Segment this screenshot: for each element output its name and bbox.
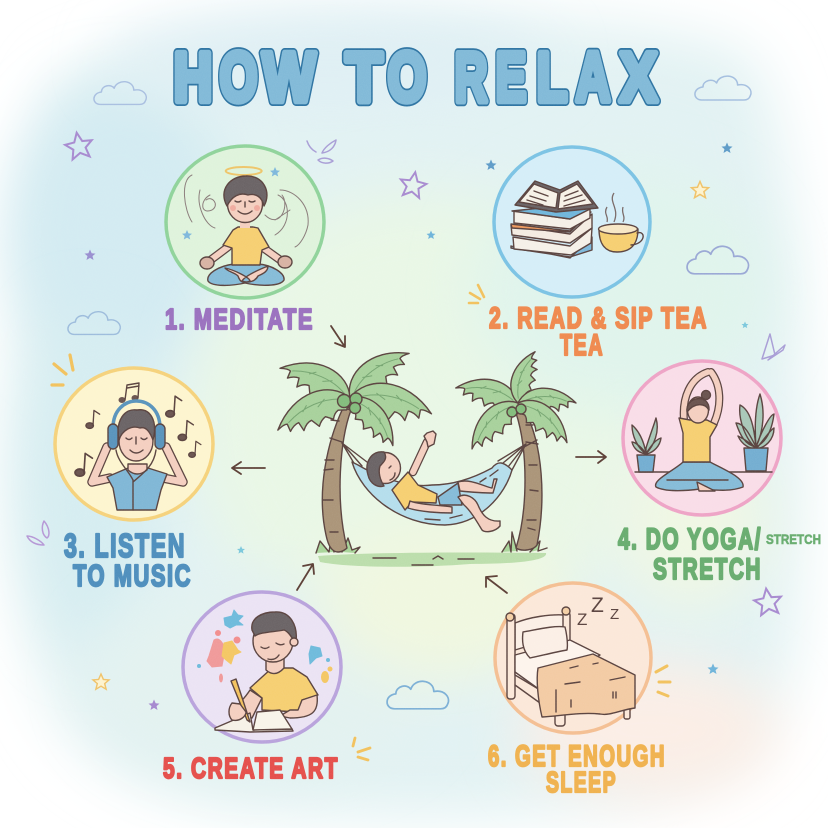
label: 2 read and sip tea (489, 302, 708, 362)
panel: central palms and hammock (270, 338, 577, 567)
icon: sleeping Z letters (577, 594, 619, 629)
left palm tree (270, 338, 436, 552)
label: 2 read and sip tea: TEA (560, 329, 604, 362)
label: 2 read and sip tea: 2. READ & SIP TEA (489, 302, 708, 335)
title: O (220, 38, 258, 116)
label: 6 get enough sleep: SLEEP (546, 767, 617, 799)
title: X (620, 38, 658, 116)
title: H (174, 38, 212, 116)
panel: 2 read and sip tea (494, 147, 650, 297)
title: R (454, 38, 488, 116)
panel: 4 yoga (623, 361, 781, 515)
title: R (454, 38, 488, 116)
arrow: to sleep (486, 576, 507, 593)
label: 1 meditate: 1. MEDITATE (165, 304, 314, 336)
label: 6 get enough sleep (488, 740, 666, 799)
title: W (262, 38, 316, 116)
title (174, 38, 658, 116)
icon: left potted plant (632, 418, 661, 472)
title: E (496, 38, 526, 116)
icon: music notes (75, 383, 201, 476)
hammock (330, 438, 538, 525)
decorative accents (27, 140, 785, 760)
title: W (262, 38, 316, 116)
title: T (346, 38, 382, 116)
decorative stars (63, 130, 783, 710)
title: E (496, 38, 526, 116)
title: O (388, 38, 426, 116)
icon: sleeping Z letters: Z (610, 606, 619, 623)
label: 4 do yoga stretch (618, 523, 821, 586)
arrow: to yoga (576, 451, 606, 463)
title: X (620, 38, 658, 116)
panel: 1 meditate (166, 146, 324, 298)
title: L (536, 38, 568, 116)
label: 3 listen to music: 3. LISTEN (64, 527, 186, 564)
label: 5 create art: 5. CREATE ART (163, 753, 339, 785)
panel: 6 get enough sleep (495, 583, 651, 733)
panel: 5 create art (183, 592, 341, 742)
title: A (576, 38, 610, 116)
icon: meditating person (200, 167, 292, 285)
person lying in hammock (367, 431, 500, 532)
title: T (346, 38, 382, 116)
title: A (576, 38, 610, 116)
icon: bed (506, 607, 635, 726)
label: 3 listen to music: TO MUSIC (73, 558, 192, 593)
icon: swirling thoughts (184, 175, 308, 247)
right palm tree (453, 347, 577, 550)
label: 6 get enough sleep: 6. GET ENOUGH (488, 740, 666, 773)
label: 4 do yoga stretch: 4. DO YOGA/ (618, 523, 762, 556)
icon: right potted plant (736, 394, 774, 471)
title: H (174, 38, 212, 116)
icon: person with headphones (92, 401, 183, 510)
label: 4 do yoga stretch: STRETCH (653, 553, 762, 586)
title: O (388, 38, 426, 116)
icon: sleeping Z letters: Z (591, 594, 604, 617)
icon: sleeping Z letters: Z (577, 610, 587, 629)
icon: tea cup with steam (598, 193, 643, 252)
decorative clouds (68, 76, 751, 709)
arrow: to create art (297, 564, 314, 590)
ground grass (316, 532, 547, 567)
title: L (536, 38, 568, 116)
icon: stack of books (511, 181, 598, 258)
arrow: to meditate (331, 326, 345, 347)
label: 3 listen to music (64, 527, 192, 593)
title: O (220, 38, 258, 116)
arrow: to listen to music (232, 462, 265, 474)
icon: person drawing (215, 612, 318, 732)
icon: person stretching (656, 372, 743, 491)
panel: 3 listen to music (55, 368, 213, 520)
icon: paint splashes (197, 610, 332, 683)
